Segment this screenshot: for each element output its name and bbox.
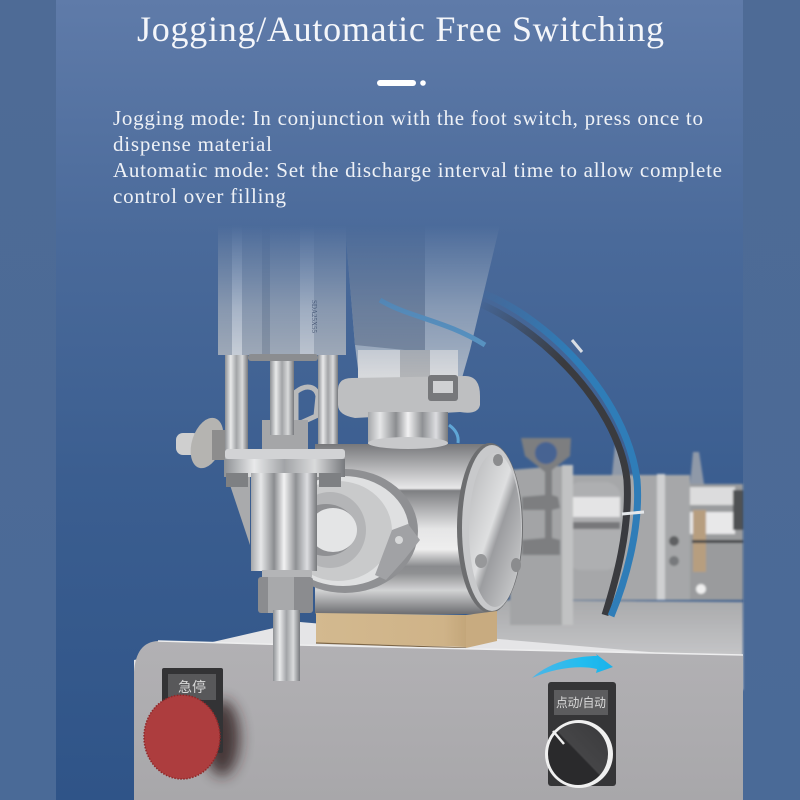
far actuator [690, 484, 743, 600]
control panel [134, 641, 743, 800]
rod collar [248, 354, 318, 361]
control panel top sliver [134, 622, 743, 680]
hose: blue [480, 292, 638, 616]
title: Jogging/Automatic Free Switching [137, 9, 664, 49]
air cylinder block [218, 225, 346, 355]
sanitary clamp ring [272, 469, 420, 593]
selector knob [548, 723, 608, 785]
hopper funnel [348, 236, 497, 376]
description text [113, 106, 722, 208]
table surface [480, 600, 743, 690]
left rod [225, 355, 248, 451]
valve linkage [262, 387, 318, 450]
wooden block [316, 611, 497, 648]
loose hose near hopper [380, 300, 485, 345]
guide rods [225, 354, 338, 451]
indicator [553, 731, 564, 744]
label window [554, 690, 608, 715]
rear posts [612, 445, 626, 475]
description text: control over filling [113, 184, 286, 208]
bracket foot [510, 465, 573, 625]
T-bolt [521, 438, 571, 555]
pump housing cylinder [315, 444, 490, 614]
nozzle [273, 610, 300, 681]
rear machine components [480, 438, 743, 690]
label: 急停 [178, 679, 206, 695]
top tri-clamp and neck [338, 375, 480, 449]
small fittings on block [669, 536, 679, 546]
emergency stop button [144, 668, 240, 779]
valve flange [224, 449, 345, 487]
disc bolts [493, 454, 503, 466]
rear bracket behind the rods [225, 450, 250, 545]
knurled nut [258, 570, 313, 613]
button shadow [204, 700, 240, 776]
title underline mark [377, 80, 426, 86]
hopper neck [358, 350, 458, 380]
mode selector switch [545, 682, 616, 788]
right rod [318, 355, 338, 451]
rear cylinder support block [573, 475, 690, 600]
button plate [162, 668, 223, 753]
centre rod [270, 360, 294, 435]
motion arrow [532, 654, 613, 678]
tri-clamp flange [338, 376, 480, 418]
clamp hinge [375, 524, 420, 580]
label window [168, 674, 216, 700]
neck pipe [368, 412, 448, 444]
red knob [144, 695, 220, 779]
end plate disc [457, 443, 523, 613]
hose: black [470, 300, 627, 615]
description text: dispense material [113, 132, 272, 156]
valve body [251, 473, 317, 571]
small blue tube [449, 425, 458, 443]
cable ties [572, 340, 582, 352]
selector knob ring [545, 720, 613, 788]
left adjustment handle [176, 414, 238, 472]
rear cylinder [565, 482, 621, 570]
description text: Jogging mode: In conjunction with the foot switch, press once to [113, 106, 703, 130]
label: 点动/自动 [556, 696, 606, 710]
pneumatic hoses [470, 292, 644, 616]
actuator cylinder and hopper, faded upward [218, 225, 500, 385]
description text: Automatic mode: Set the discharge interval time to allow complete [113, 158, 722, 182]
model label on cylinder: SDA25X55 [310, 300, 318, 334]
selector plate [548, 682, 616, 786]
